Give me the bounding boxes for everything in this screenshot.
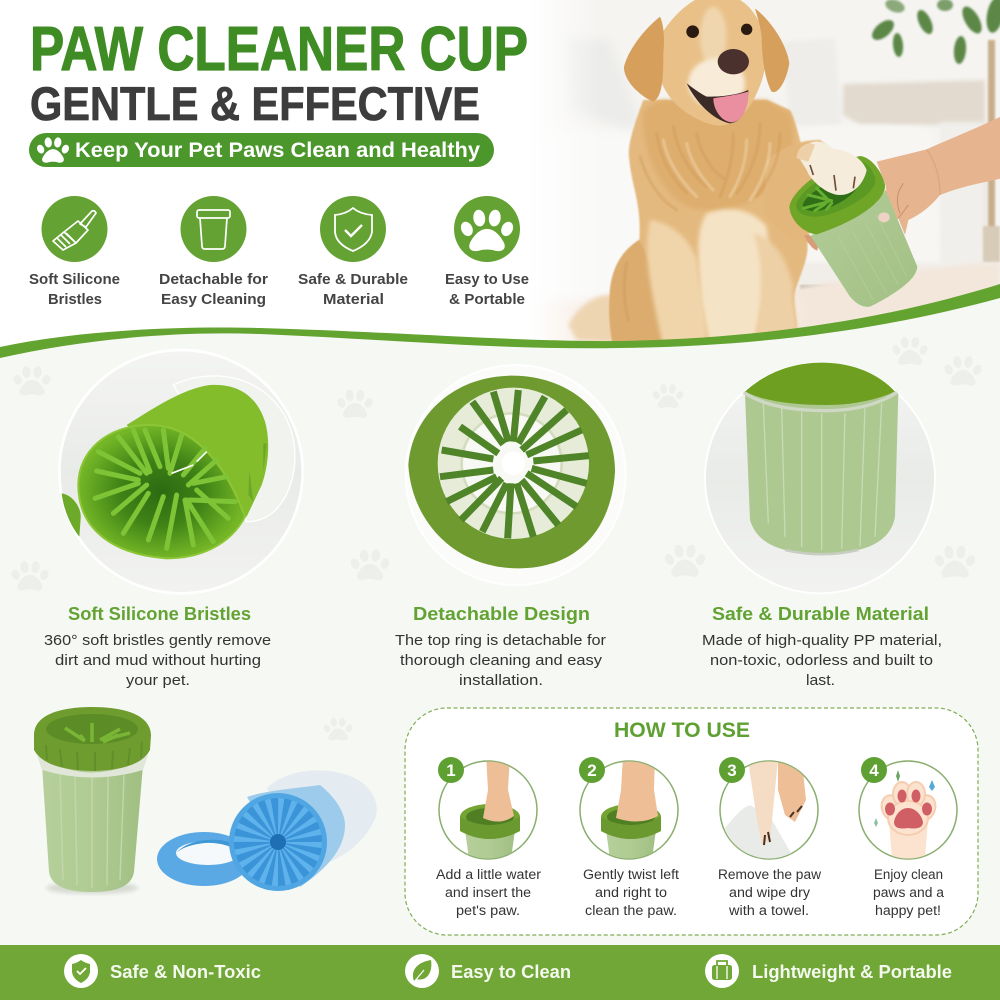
- dog head: [624, 0, 789, 126]
- feature: detachable: Easy Cleaning: [161, 292, 266, 308]
- step 3: 3: [727, 761, 737, 780]
- step 4: Enjoy clean: [874, 867, 943, 882]
- benefit: lightweight and portable: [705, 954, 952, 988]
- feature text: safe and durable material: non-toxic, odorless and built to: [710, 652, 933, 669]
- feature: easy to use: Easy to Use: [445, 272, 529, 288]
- step 2: [579, 755, 679, 918]
- product photo: blue ring: [157, 832, 251, 886]
- benefit: safe and non-toxic: Safe & Non-Toxic: [110, 962, 261, 982]
- feature text: detachable design: Detachable Design: [413, 604, 590, 624]
- bristles: [95, 430, 235, 548]
- step 3: [718, 757, 821, 918]
- feature text: soft silicone bristles: dirt and mud without hurting: [55, 652, 261, 669]
- tagline pill: [29, 133, 494, 167]
- feature text: soft silicone bristles: [44, 604, 271, 689]
- feature: safe and durable: [298, 196, 408, 308]
- benefit: safe and non-toxic: [64, 954, 261, 988]
- step 1: [436, 755, 542, 918]
- step 1: pet's paw.: [456, 903, 520, 918]
- feature text: detachable design: thorough cleaning and easy: [400, 652, 603, 669]
- product photo: blue cup: [229, 770, 377, 891]
- step 2: and right to: [595, 885, 667, 900]
- step 4: paws and a: [873, 885, 944, 900]
- feature: safe and durable: Safe & Durable: [298, 272, 408, 288]
- bottom benefits bar: [0, 945, 1000, 1000]
- thumb nail: [878, 212, 890, 222]
- step 1: and insert the: [445, 885, 531, 900]
- tagline pill: Keep Your Pet Paws Clean and Healthy: [75, 139, 480, 162]
- step 2: 2: [587, 761, 597, 780]
- cup opening: [78, 425, 245, 558]
- cup body: [810, 192, 917, 307]
- benefit: easy to clean: [405, 954, 571, 988]
- feature: soft silicone bristles: [29, 196, 120, 308]
- benefit: easy to clean: Easy to Clean: [451, 962, 571, 982]
- product photo: green cup: [34, 707, 151, 894]
- hero photo: golden retriever with paw in cleaner cup: [480, 0, 1000, 350]
- title: PAW CLEANER CUP: [30, 15, 528, 84]
- arm and hand: [875, 116, 1000, 235]
- step 4: happy pet!: [875, 903, 941, 918]
- feature text: detachable design: The top ring is detachable for: [395, 632, 606, 649]
- feature: safe and durable: Material: [323, 292, 384, 308]
- feature text: soft silicone bristles: Soft Silicone Bristles: [68, 604, 251, 624]
- feature text: safe and durable material: Safe & Durable Material: [712, 604, 929, 624]
- white fade under text: [480, 0, 600, 350]
- how to use panel: [405, 708, 978, 935]
- product circle: durable body: [705, 363, 935, 593]
- step 4: 4: [869, 761, 879, 780]
- feature text: safe and durable material: Made of high-quality PP material,: [702, 632, 942, 649]
- feature: soft silicone bristles: Bristles: [48, 292, 102, 308]
- feature text: safe and durable material: last.: [806, 672, 835, 689]
- how to use heading: HOW TO USE: [614, 719, 750, 742]
- finger behind cup: [804, 235, 820, 251]
- step 3: and wipe dry: [729, 885, 810, 900]
- feature: detachable: Detachable for: [159, 272, 268, 288]
- step 3: with a towel.: [728, 903, 809, 918]
- feature: easy to use: & Portable: [449, 292, 525, 308]
- product circle: bristles: [59, 350, 303, 593]
- subtitle: GENTLE & EFFECTIVE: [30, 77, 480, 130]
- feature: easy to use: [445, 196, 529, 308]
- step 4: [859, 757, 957, 918]
- fur strokes: [624, 123, 780, 320]
- step 3: Remove the paw: [718, 867, 821, 882]
- step 2: Gently twist left: [583, 867, 679, 882]
- ghost paw watermarks: [10, 336, 983, 740]
- lower section background: [0, 290, 1000, 1000]
- feature text: detachable design: installation.: [459, 672, 543, 689]
- cup rim and bristles: [809, 188, 886, 235]
- step 1: Add a little water: [436, 867, 542, 882]
- plant leaves: [869, 0, 1000, 64]
- product circle: detachable ring: [406, 365, 626, 585]
- step 2: clean the paw.: [585, 903, 677, 918]
- paw: [799, 142, 867, 195]
- arm, hand and photo cup: [789, 116, 1000, 307]
- green wave divider: [0, 284, 1000, 358]
- feature text: detachable design: [395, 604, 606, 689]
- step 1: 1: [446, 761, 456, 780]
- feature text: soft silicone bristles: your pet.: [126, 672, 190, 689]
- feature: detachable: [159, 196, 268, 308]
- green cup body: [127, 385, 268, 517]
- translucent outer cup: [173, 376, 295, 522]
- benefit: lightweight and portable: Lightweight & Portable: [752, 962, 952, 982]
- feature text: safe and durable material: [702, 604, 942, 689]
- feature: soft silicone bristles: Soft Silicone: [29, 272, 120, 288]
- dog: [568, 0, 863, 347]
- feature text: soft silicone bristles: 360° soft bristles gently remove: [44, 632, 271, 649]
- room background: [500, 0, 1000, 350]
